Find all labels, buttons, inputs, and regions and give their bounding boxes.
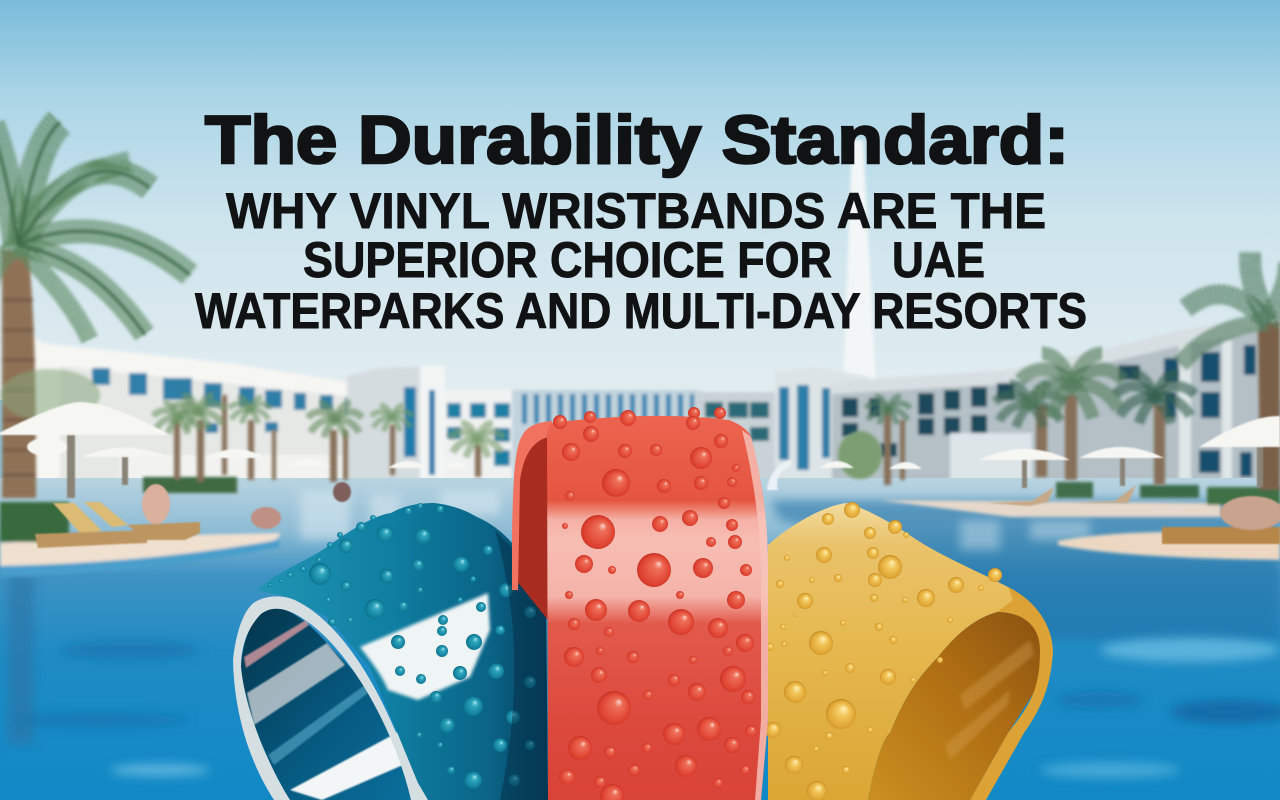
- red band inner wall: [516, 436, 548, 620]
- yellow band interior reflection: [945, 640, 1034, 760]
- yellow band outer face: [768, 503, 1013, 800]
- wristband: red: [512, 407, 768, 800]
- building: centre-left tower: [347, 366, 445, 482]
- background: resort buildings: [30, 312, 1280, 490]
- building: centre-right tower: [775, 367, 869, 482]
- blue band highlight: [360, 593, 490, 700]
- red band rim: [512, 421, 552, 590]
- subtitle line 2: SUPERIOR CHOICE FOR: [303, 232, 832, 288]
- blue band rim: [233, 596, 428, 800]
- palms: distant crowns: [0, 354, 1195, 479]
- blue band interior reflections: [244, 620, 410, 800]
- blue band right shadow: [495, 530, 548, 800]
- palm: right: [1180, 252, 1280, 490]
- background: sun loungers and guests: [35, 482, 1280, 548]
- background: parasols: [0, 402, 1280, 498]
- blue band inner surface: [241, 608, 411, 800]
- building: right wing: [832, 312, 1280, 490]
- building: left wing: [30, 332, 400, 482]
- red band right edge sheen: [742, 430, 768, 800]
- fountain: [767, 460, 791, 490]
- red band droplets: [553, 407, 757, 800]
- background: right pool decks: [880, 482, 1280, 560]
- blue band droplets: [268, 503, 536, 789]
- title: main heading: The Durability Standard:: [205, 102, 1069, 178]
- water reflections: [8, 490, 1280, 778]
- background: tower: [843, 140, 876, 385]
- title block: [195, 102, 1087, 339]
- background: palm trees: [0, 122, 1280, 498]
- wristband: yellow: [765, 502, 1053, 800]
- building: centre block: [445, 390, 775, 482]
- yellow band inner surface: [868, 612, 1040, 800]
- yellow band droplets: [765, 502, 1002, 800]
- wristband: blue: [233, 503, 548, 800]
- background: left pool deck: [0, 477, 280, 577]
- background: pool water: [0, 478, 1280, 800]
- blue band outer face: [257, 503, 548, 800]
- subtitle line 2: UAE: UAE: [892, 232, 985, 288]
- subtitle line 1: WHY VINYL WRISTBANDS ARE THE: [226, 183, 1046, 239]
- subtitle line 3: WATERPARKS AND MULTI-DAY RESORTS: [195, 283, 1087, 339]
- background: sky: [0, 0, 1280, 400]
- water: right deep tone: [770, 500, 1280, 640]
- red band outer face: [547, 416, 768, 800]
- yellow band rim: [970, 587, 1053, 800]
- palm: large left: [0, 122, 190, 498]
- palms: distant trunks: [174, 395, 1165, 485]
